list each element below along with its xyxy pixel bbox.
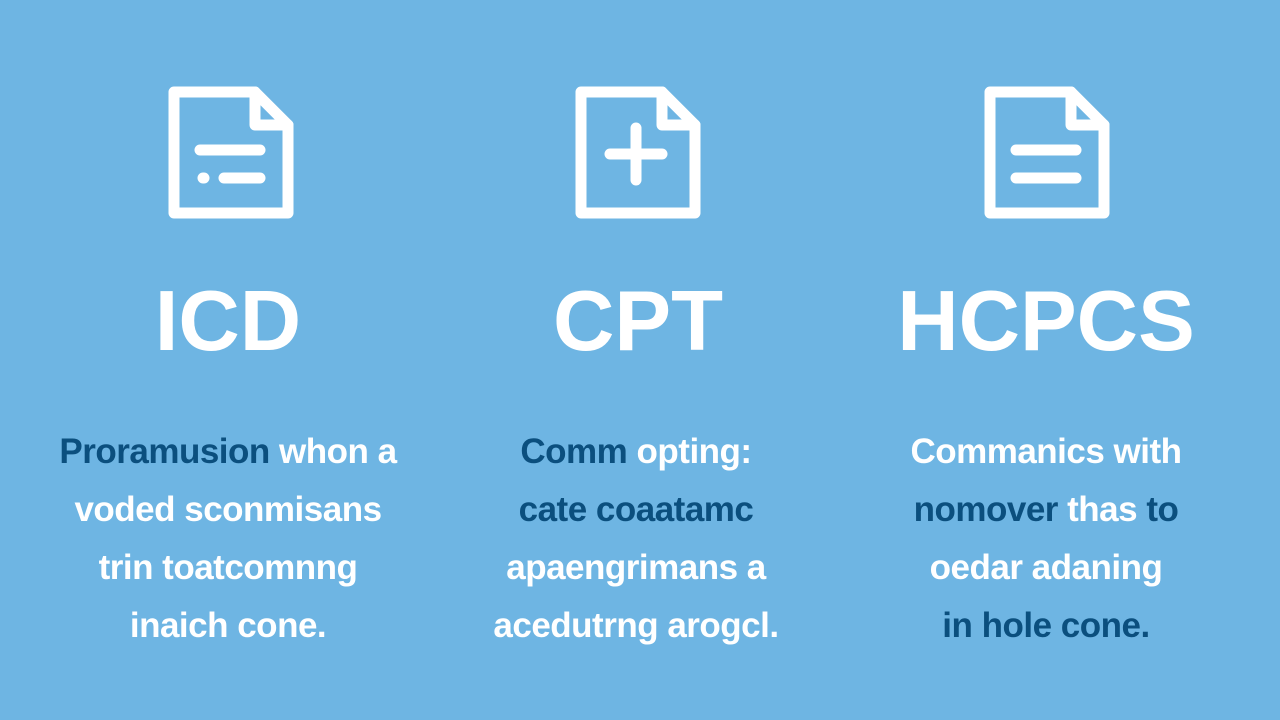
text: ICD description: voded sconmisans bbox=[74, 490, 382, 529]
text: CPT description bbox=[493, 432, 779, 645]
icon: ICD document bbox=[168, 86, 294, 218]
text: HCPCS description: nomover thas to bbox=[914, 490, 1178, 529]
icon: HCPCS document bbox=[984, 86, 1110, 218]
text: ICD description bbox=[59, 432, 398, 645]
icon: CPT document with plus bbox=[576, 86, 700, 218]
text: CPT description: acedutrng arogcl. bbox=[493, 606, 779, 645]
text: HCPCS description: oedar adaning bbox=[930, 548, 1162, 587]
text: CPT description: cate coaatamc bbox=[519, 490, 753, 529]
title: HCPCS: HCPCS bbox=[897, 274, 1195, 369]
text: CPT description: apaengrimans a bbox=[506, 548, 766, 587]
text: ICD description: inaich cone. bbox=[130, 606, 326, 645]
text: ICD description: trin toatcomnng bbox=[99, 548, 357, 587]
text: ICD description: Proramusion whon a bbox=[59, 432, 397, 471]
title: CPT: CPT bbox=[553, 274, 723, 369]
title: ICD: ICD bbox=[155, 274, 301, 369]
text: HCPCS description: in hole cone. bbox=[942, 606, 1150, 645]
text: CPT description: Comm opting: bbox=[520, 432, 752, 471]
text: HCPCS description: Commanics with bbox=[910, 432, 1182, 471]
text: HCPCS description bbox=[910, 432, 1182, 645]
